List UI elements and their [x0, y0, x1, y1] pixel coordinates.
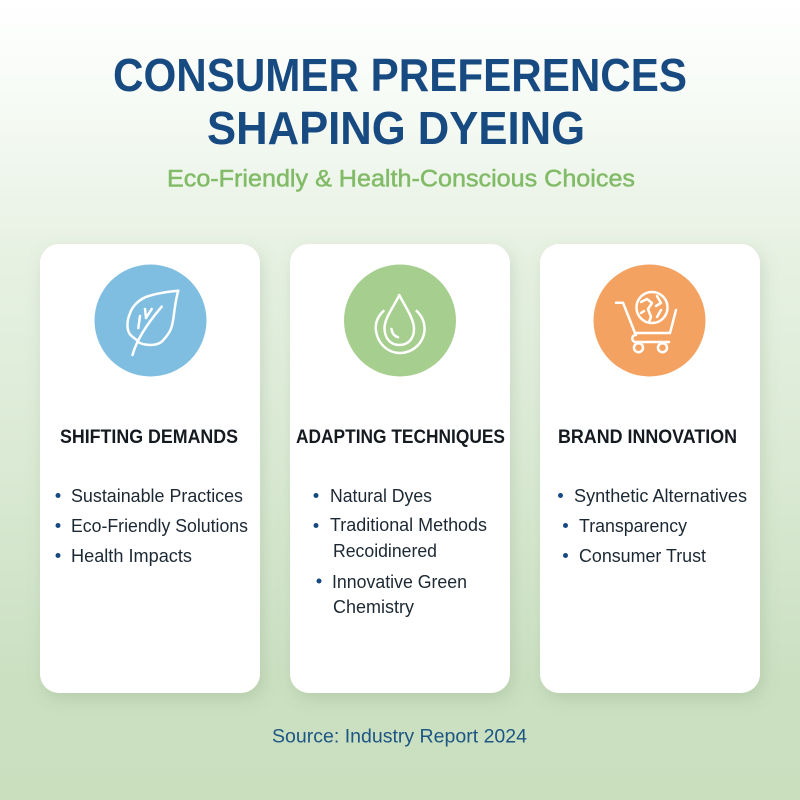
- list: adapting techniques: Recoidinered: [333, 541, 437, 561]
- title: CONSUMER PREFERENCES: [113, 49, 687, 101]
- icon: leaf: [94, 264, 206, 376]
- list: brand innovation: Synthetic Alternatives: [574, 486, 747, 506]
- icon: shopping cart with globe: [594, 264, 706, 376]
- list: shifting demands: Health Impacts: [71, 546, 192, 566]
- list: adapting techniques: Natural Dyes: [330, 486, 432, 506]
- list: adapting techniques: Chemistry: [333, 597, 414, 617]
- subtitle: Eco-Friendly & Health-Conscious Choices: [167, 166, 635, 192]
- list: brand innovation: Transparency: [579, 516, 687, 536]
- list: adapting techniques: [314, 486, 487, 617]
- title: [113, 49, 687, 154]
- icon: water drop: [344, 264, 456, 376]
- source note: Source: Industry Report 2024: [272, 726, 527, 748]
- heading: brand innovation: BRAND INNOVATION: [558, 427, 737, 448]
- heading: adapting techniques: ADAPTING TECHNIQUES: [296, 427, 505, 448]
- panel: shifting demands: [40, 244, 260, 693]
- list: adapting techniques: Traditional Methods: [330, 515, 487, 535]
- list: brand innovation: Consumer Trust: [579, 546, 706, 566]
- title: SHAPING DYEING: [207, 102, 585, 154]
- list: shifting demands: Sustainable Practices: [71, 486, 243, 506]
- list: adapting techniques: Innovative Green: [332, 572, 467, 592]
- list: shifting demands: [56, 486, 248, 566]
- panel: adapting techniques: [290, 244, 510, 693]
- list: shifting demands: Eco-Friendly Solutions: [71, 516, 248, 536]
- list: brand innovation: [558, 486, 747, 566]
- panel: brand innovation: [540, 244, 760, 693]
- heading: shifting demands: SHIFTING DEMANDS: [60, 427, 238, 448]
